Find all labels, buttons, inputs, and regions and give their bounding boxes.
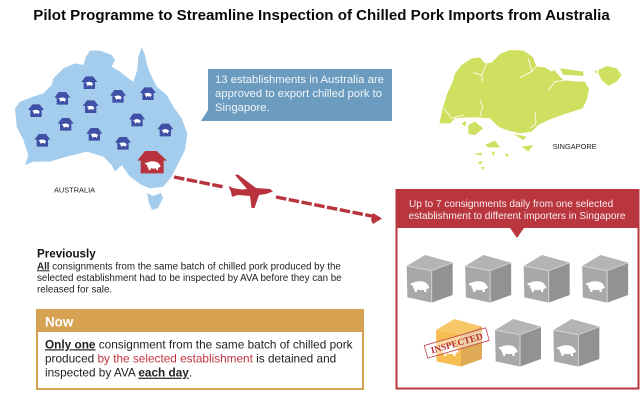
grey boxes <box>407 255 628 367</box>
blue establishment houses <box>28 76 173 150</box>
callout: 13 establishments: Singapore. <box>215 102 270 114</box>
Now body text: inspected by AVA each day. <box>45 366 192 380</box>
map: Singapore <box>439 50 622 170</box>
Australia label: AUSTRALIA <box>54 186 95 195</box>
Now heading: Now <box>45 315 74 330</box>
Now body text: produced by the selected establishment is detained and <box>45 352 336 366</box>
inspected stamp: INSPECTED <box>430 332 484 356</box>
text block: Previously: released for sale. <box>37 285 112 296</box>
panel: consignments: Up to 7 consignments daily from one selected <box>409 199 613 210</box>
consignments header <box>396 189 639 238</box>
Tasmania <box>147 193 163 210</box>
text block: Previously: Previously <box>37 247 96 260</box>
Singapore main island <box>439 50 589 133</box>
panel: Now <box>37 310 363 389</box>
inspected box <box>436 319 482 367</box>
Now body text <box>45 337 353 380</box>
map: Australia <box>15 47 187 210</box>
Singapore label: SINGAPORE <box>553 142 597 151</box>
selected red house <box>137 151 167 173</box>
callout: 13 establishments: approved to export chilled pork to <box>215 88 382 100</box>
text block: Previously <box>37 247 342 296</box>
panel: consignments <box>396 189 639 388</box>
callout: 13 establishments <box>201 69 392 121</box>
callout: 13 establishments: 13 establishments in Australia are <box>215 74 384 86</box>
text block: Previously: All consignments from the same batch of chilled pork produced by the <box>37 261 341 272</box>
panel: consignments: establishment to different importers in Singapore <box>408 211 626 222</box>
arrow: dashed route with plane <box>174 174 382 224</box>
Now body text: Only one consignment from the same batch of chilled pork <box>45 337 353 351</box>
title: Pilot Programme to Streamline Inspection of Chilled Pork Imports from Australia <box>33 7 610 24</box>
offshore islands <box>462 66 622 170</box>
text block: Previously: selected establishment had to be inspected by AVA before they can be <box>37 273 342 284</box>
creeks <box>444 58 567 128</box>
icon: plane <box>228 174 273 208</box>
inspected stamp <box>424 328 489 358</box>
Australia landmass <box>15 47 187 188</box>
